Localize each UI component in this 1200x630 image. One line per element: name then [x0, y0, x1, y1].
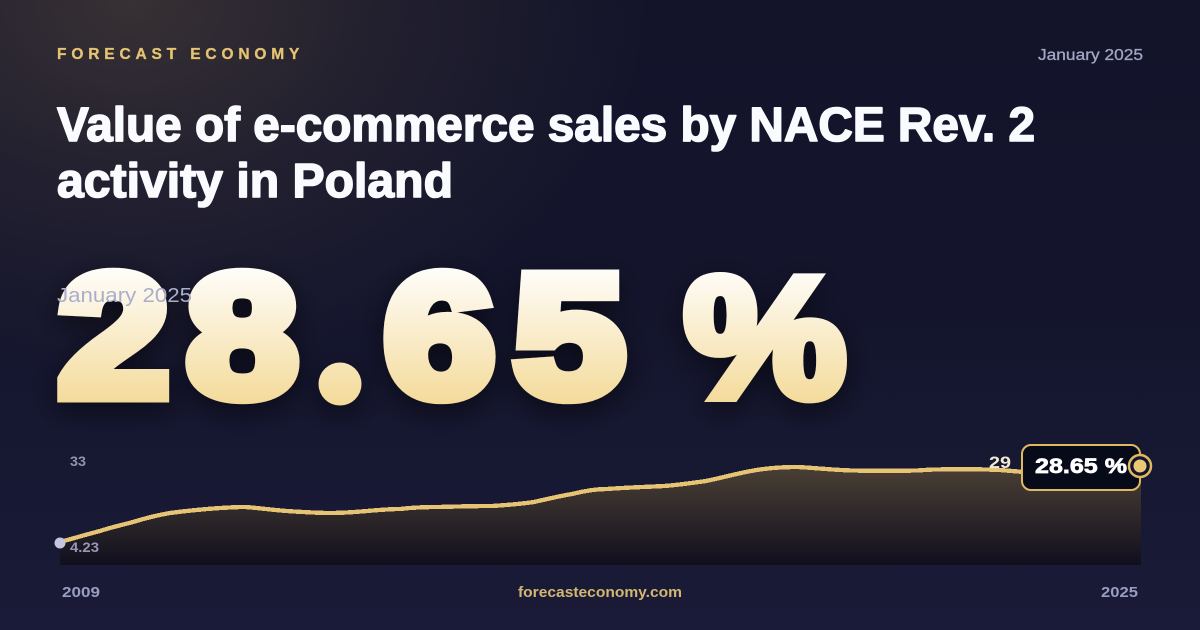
start point marker — [54, 538, 66, 548]
x axis start year: 2009 — [62, 584, 100, 601]
x axis end year: 2025 — [1101, 584, 1138, 601]
website: forecasteconomy.com — [518, 584, 682, 601]
chart trend line — [60, 467, 1024, 542]
last rounded value label: 29 — [989, 453, 1011, 472]
value callout: 28.65 % — [1035, 455, 1127, 478]
date overlapping the big number: January 2025 — [57, 285, 192, 307]
end point marker — [1129, 455, 1151, 477]
line chart — [54, 466, 1141, 565]
big number value: % — [684, 243, 846, 433]
value callout — [1022, 445, 1140, 490]
title: Value of e-commerce sales by NACE Rev. 2 — [57, 99, 1035, 152]
title — [57, 99, 1035, 208]
big number value: . — [326, 301, 354, 413]
date top right: January 2025 — [1038, 47, 1143, 64]
title: activity in Poland — [57, 155, 453, 208]
chart area fill — [60, 466, 1141, 565]
axis max label: 33 — [70, 453, 86, 469]
eyebrow: brand name: FORECAST ECONOMY — [57, 46, 304, 63]
big number value: 65 — [384, 239, 625, 433]
big number value — [58, 239, 846, 433]
big number value: 28 — [58, 239, 298, 433]
axis min label: 4.23 — [70, 539, 99, 555]
